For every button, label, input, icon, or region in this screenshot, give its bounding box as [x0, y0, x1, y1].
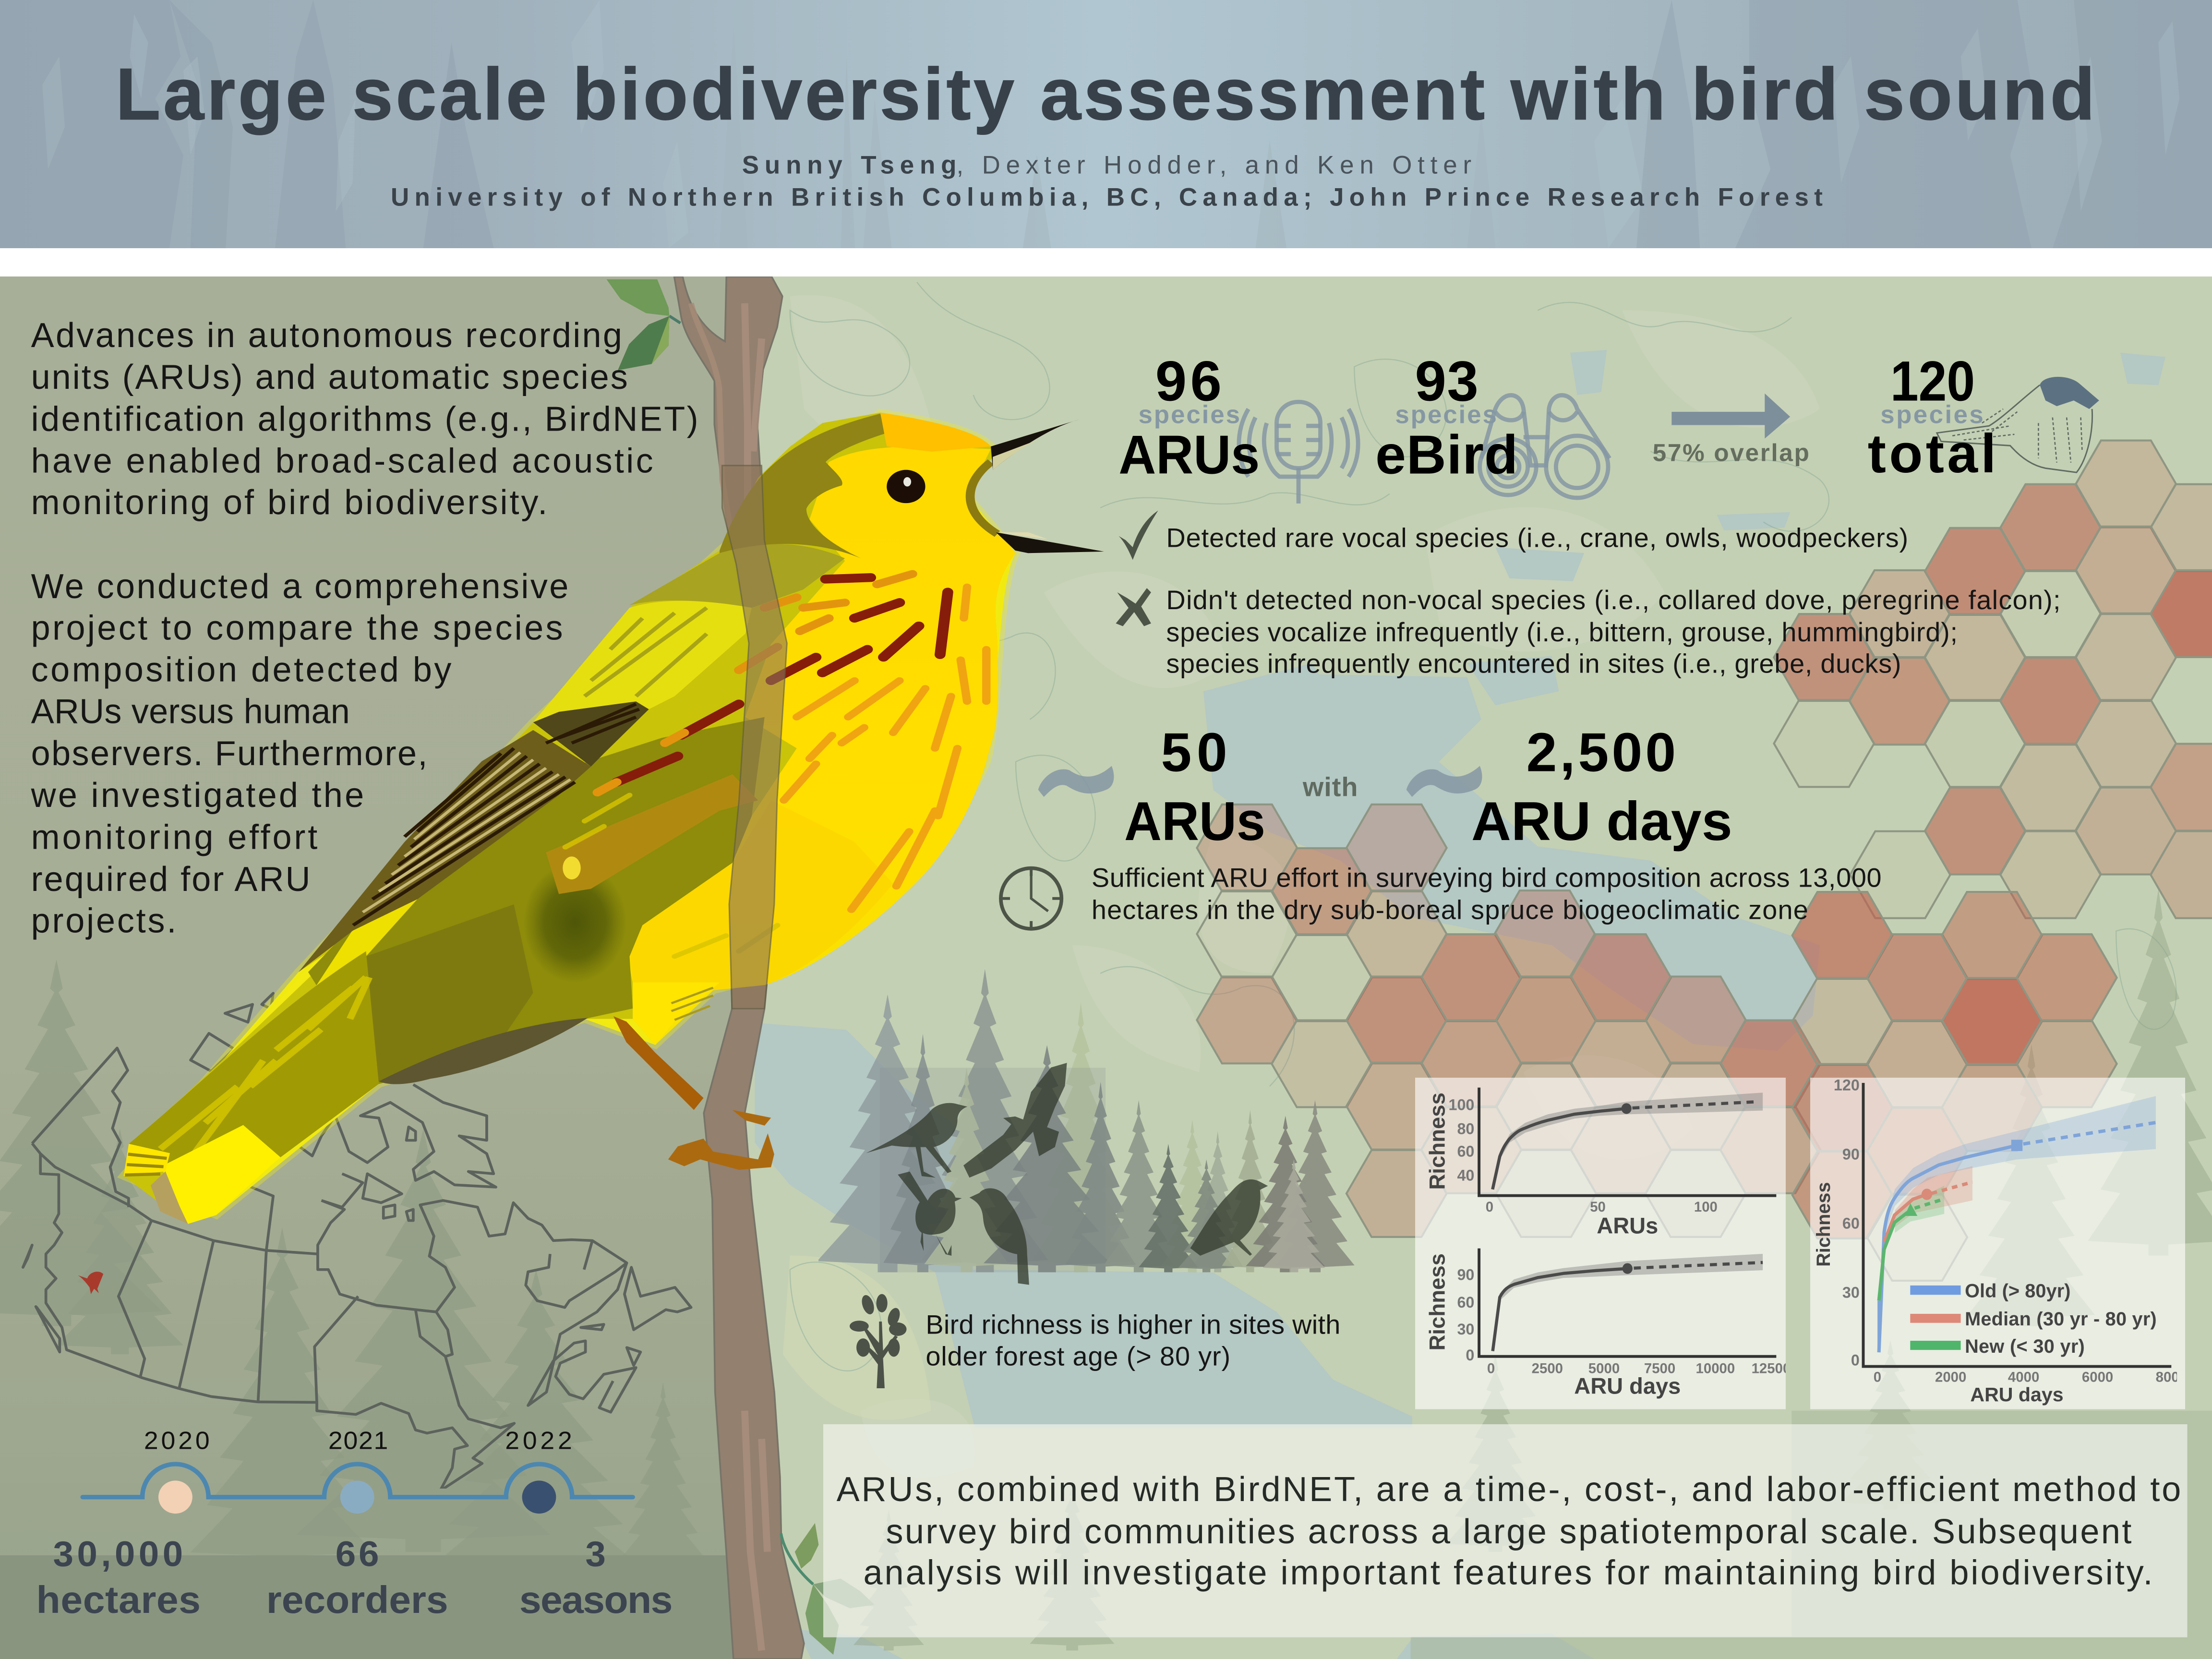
shoulder highlight	[563, 856, 581, 879]
affiliation: University of Northern British Columbia, BC, Canada; John Prince Research Forest	[391, 183, 1823, 211]
wren	[898, 1172, 962, 1256]
finding: undetected species: species vocalize infrequently (i.e., bittern, grouse, hummingbird);	[1166, 617, 1958, 647]
eBird: eBird	[1375, 424, 1518, 486]
panel: conclusion box: ARUs, combined with BirdNET, are a time-, cost-, and labor-efficient method to	[837, 1470, 2181, 1509]
tree: trunk and leaves	[607, 276, 875, 1659]
finding: undetected species	[1166, 585, 2061, 679]
left panel introduction text: projects.	[31, 902, 176, 940]
icon: lower leaves	[781, 1523, 875, 1655]
panel: left column background	[0, 276, 736, 1659]
upper wing covert	[533, 601, 752, 722]
seasons stat	[519, 1534, 673, 1622]
dot 2021	[340, 1480, 374, 1514]
timeline	[36, 1427, 673, 1622]
seasons stat: 3	[585, 1534, 606, 1574]
species label: species	[1395, 401, 1497, 429]
chart panel: richness by ARUs and ARU days	[1415, 1078, 1786, 1409]
icon: check mark	[1118, 511, 1158, 560]
120: 120	[1890, 350, 1975, 413]
legend: Old (> 80yr)	[1965, 1280, 2070, 1301]
finding: detected species: Detected rare vocal species (i.e., crane, owls, woodpeckers)	[1166, 523, 1908, 553]
wing shoulder	[546, 774, 758, 894]
body glow	[124, 413, 1015, 1215]
icon: clock	[1001, 868, 1061, 929]
seasons stat: seasons	[519, 1579, 673, 1622]
legend: Median (30 yr - 80 yr)	[1965, 1309, 2156, 1330]
chart: richness by ARUs: 40	[1457, 1167, 1474, 1184]
olive flank	[308, 717, 765, 1084]
illustration: bird silhouettes	[866, 1063, 1268, 1285]
left panel introduction text: monitoring effort	[31, 818, 317, 857]
effort: 2,500 ARU days: 2,500	[1527, 722, 1676, 783]
effort: 50 ARUs	[1124, 722, 1265, 852]
tail tan end	[151, 1171, 188, 1224]
icon: line-art bird	[1937, 377, 2099, 472]
chart: richness by ARU days: 60	[1457, 1294, 1474, 1311]
thigh and undertail	[633, 983, 720, 1045]
panel: hexagon sampling grid	[1196, 440, 2212, 1282]
tail streaks	[160, 977, 369, 1165]
thigh hatch	[672, 987, 713, 1020]
flying bird	[963, 1063, 1067, 1178]
panel: conclusion box	[823, 1424, 2188, 1637]
left panel introduction text: composition detected by	[31, 650, 451, 689]
crown	[720, 414, 886, 558]
feet	[668, 1110, 774, 1170]
hectares stat: 30,000	[53, 1534, 183, 1574]
chart: richness by ARU days: ARU days	[1574, 1373, 1681, 1398]
contour lines	[790, 282, 2176, 1371]
upper tail tip	[124, 1144, 170, 1176]
hectares stat: hectares	[36, 1579, 201, 1622]
year labels: 2022	[505, 1427, 572, 1455]
left panel introduction text: identification algorithms (e.g., BirdNET)	[31, 400, 698, 439]
chart: richness by ARUs: 100	[1448, 1096, 1474, 1114]
chart panel: richness by forest age: 4000	[2008, 1369, 2039, 1385]
icon: microphone	[1239, 402, 1358, 504]
eye	[887, 470, 926, 503]
legend: New (< 30 yr)	[1965, 1336, 2084, 1357]
chart: richness by ARU days	[1425, 1249, 1791, 1398]
chart panel: richness by forest age: 60	[1842, 1215, 1859, 1232]
left panel introduction text: monitoring of bird biodiversity.	[31, 483, 547, 522]
year labels: 2020	[144, 1427, 210, 1455]
left panel introduction text	[31, 316, 698, 940]
left panel introduction text: Advances in autonomous recording	[31, 316, 622, 355]
dot 2022	[522, 1480, 556, 1514]
ARUs: ARUs	[1118, 424, 1260, 486]
back plumage	[630, 544, 845, 608]
finding: forest age: Bird richness is higher in sites with	[926, 1310, 1340, 1340]
recorders stat: recorders	[266, 1579, 448, 1622]
left panel introduction text: observers. Furthermore,	[31, 734, 427, 773]
year labels: 2021	[328, 1427, 388, 1455]
chart: richness by ARUs: 80	[1457, 1120, 1474, 1138]
left panel introduction text: we investigated the	[31, 776, 364, 815]
wing coverts dark	[533, 701, 649, 767]
legend	[1910, 1280, 2156, 1357]
finding: undetected species: Didn't detected non-vocal species (i.e., collared dove, peregrine falcon);	[1166, 585, 2061, 615]
mouth	[970, 462, 998, 534]
covert feather lines	[585, 608, 707, 696]
icon: approximately symbol right	[1407, 766, 1482, 797]
title: Large scale biodiversity assessment with bird sound	[116, 54, 2095, 135]
tail tip	[161, 1125, 280, 1224]
dot 2020	[158, 1480, 192, 1514]
effort: 2,500 ARU days	[1471, 722, 1732, 852]
bird base silhouette	[124, 413, 1015, 1224]
chart: richness by ARUs: 50	[1590, 1199, 1606, 1215]
chart panel: richness by forest age: 6000	[2081, 1369, 2113, 1385]
stats: eBird species	[1375, 350, 1610, 498]
96: 96	[1155, 350, 1222, 413]
panel: stats and findings	[999, 350, 2099, 931]
chart: richness by ARU days: 10000	[1695, 1361, 1735, 1377]
chart: richness by ARU days: 7500	[1644, 1361, 1675, 1377]
chart: richness by ARUs: Richness	[1425, 1093, 1449, 1190]
chart: richness by ARUs: 60	[1457, 1143, 1474, 1160]
illustration: forest silhouettes	[818, 969, 1355, 1388]
93: 93	[1415, 350, 1479, 413]
panel: left ground strip	[0, 1555, 736, 1659]
arrow: overlap	[1671, 394, 1790, 439]
chart panel: richness by forest age: 2000	[1935, 1369, 1966, 1385]
year labels	[144, 1427, 572, 1455]
species label: species	[1139, 401, 1240, 429]
total: total	[1868, 423, 1996, 484]
chart: richness by ARUs: 100	[1694, 1199, 1717, 1215]
eye highlight	[903, 477, 911, 486]
left panel introduction text: We conducted a comprehensive	[31, 567, 568, 606]
left panel introduction text: units (ARUs) and automatic species	[31, 358, 628, 397]
chart panel: richness by forest age: ARU days	[1970, 1383, 2063, 1406]
upper bill	[991, 420, 1080, 470]
left panel introduction text: ARUs versus human	[31, 693, 350, 731]
chart panel: richness by forest age	[1810, 1078, 2185, 1409]
chart: richness by ARU days: 0	[1466, 1346, 1474, 1364]
species label: species	[1880, 401, 1984, 429]
chart: richness by ARU days: Richness	[1425, 1253, 1449, 1351]
finding: sufficient effort	[1092, 863, 1882, 925]
with label: with	[1302, 772, 1358, 802]
chart panel: richness by forest age: 0	[1873, 1369, 1881, 1385]
authors: Sunny Tseng	[742, 151, 956, 179]
chart panel: richness by forest age: 90	[1842, 1146, 1859, 1163]
icon: approximately symbol left	[1038, 766, 1114, 797]
icon: study-site bird on map	[78, 1272, 103, 1294]
thrush	[1190, 1179, 1268, 1256]
map of Canada	[22, 992, 692, 1489]
primary feather stripes	[353, 704, 639, 925]
finding: sufficient effort: Sufficient ARU effort in surveying bird composition across 13,000	[1092, 863, 1882, 893]
stats: ARU species	[1118, 350, 1358, 504]
chart: richness by ARU days: 90	[1457, 1266, 1474, 1284]
chart: richness by ARUs: 0	[1485, 1199, 1493, 1215]
forehead	[880, 413, 991, 452]
dark shadow blob	[524, 863, 626, 983]
stats: total species	[1868, 350, 2099, 484]
icon: binoculars	[1480, 396, 1610, 498]
left panel introduction text: required for ARU	[31, 860, 311, 899]
illustration: yellow warbler	[117, 409, 1104, 1224]
effort: 50 ARUs: ARUs	[1124, 791, 1265, 852]
authors: , Dexter Hodder, and Ken Otter	[956, 151, 1471, 179]
pale wing bar	[308, 899, 418, 998]
chart: richness by ARU days: 5000	[1588, 1361, 1620, 1377]
lower bill pale edge	[996, 532, 1047, 539]
recorders stat	[266, 1534, 448, 1622]
tail	[129, 951, 379, 1166]
finding: sufficient effort: hectares in the dry sub-boreal spruce biogeoclimatic zone	[1092, 895, 1808, 925]
tail tip stripes	[125, 1154, 167, 1175]
effort: 50 ARUs: 50	[1161, 722, 1227, 783]
perched bird	[866, 1103, 967, 1178]
breast and belly	[630, 446, 1015, 1045]
chart panel: richness by forest age: Richness	[1813, 1182, 1834, 1267]
chart: richness by ARUs: ARUs	[1597, 1213, 1658, 1238]
effort: 2,500 ARU days: ARU days	[1471, 791, 1732, 852]
icon: tree with leaves	[849, 1294, 906, 1388]
tree: trunk overlay across bird	[721, 465, 788, 1009]
timeline line and arcs	[83, 1464, 633, 1497]
lower bill	[996, 532, 1104, 553]
recorders stat: 66	[336, 1534, 379, 1574]
upper bill pale edge	[993, 439, 1041, 470]
finding: undetected species: species infrequently encountered in sites (i.e., grebe, ducks)	[1166, 649, 1901, 679]
finch	[969, 1189, 1029, 1285]
57% overlap label: 57% overlap	[1653, 439, 1809, 467]
rump	[282, 904, 533, 1128]
finding: forest age: older forest age (> 80 yr)	[926, 1341, 1230, 1371]
hectares stat	[36, 1534, 201, 1622]
panel: left forest silhouettes	[0, 960, 703, 1555]
panel: conclusion box: survey bird communities across a large spatiotemporal scale. Subsequent	[886, 1513, 2132, 1551]
chart panel: richness by forest age: 30	[1842, 1284, 1859, 1301]
left panel introduction text: project to compare the species	[31, 609, 563, 648]
wing primaries	[299, 730, 591, 972]
throat and breast streaks	[565, 574, 986, 956]
icon: cross mark	[1116, 588, 1151, 626]
chart: richness by ARU days: 2500	[1531, 1361, 1563, 1377]
under wing	[379, 1018, 588, 1084]
header banner	[0, 0, 2212, 248]
chart: richness by ARUs	[1425, 1088, 1776, 1238]
chart: richness by ARU days: 0	[1487, 1361, 1495, 1377]
legs	[613, 1016, 704, 1110]
left panel introduction text: have enabled broad-scaled acoustic	[31, 442, 653, 480]
panel: conclusion box: analysis will investigate important features for maintaining bird biodiversity.	[864, 1553, 2153, 1592]
chart panel: richness by forest age: 0	[1851, 1352, 1859, 1369]
chart: richness by ARU days: 30	[1457, 1321, 1474, 1338]
finding: forest age	[926, 1310, 1340, 1371]
icon: upper leaves	[607, 279, 681, 370]
lower belly tint	[630, 800, 893, 993]
